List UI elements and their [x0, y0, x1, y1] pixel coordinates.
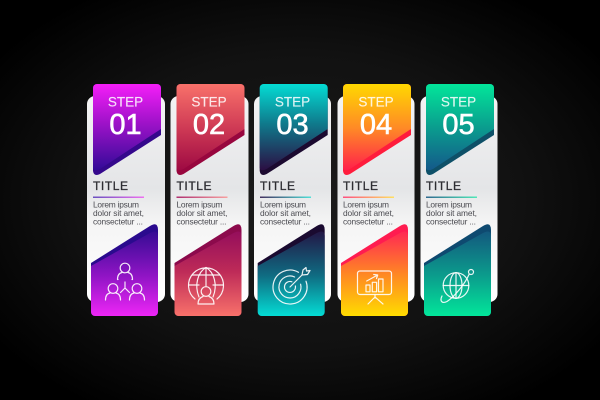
body text 4: consectetur ... — [343, 216, 393, 226]
body text 3: dolor sit amet, — [260, 208, 311, 218]
body text 4 — [343, 200, 394, 226]
body text 1: consectetur ... — [93, 216, 143, 226]
top ribbon 1 — [93, 84, 161, 175]
card body 4 — [338, 96, 414, 302]
body text 2 — [176, 200, 228, 226]
title 5: TITLE — [426, 179, 461, 193]
divider 5 — [426, 196, 477, 198]
step number 3: 03 — [276, 109, 309, 141]
step number 5: 05 — [442, 109, 475, 141]
body text 4: Lorem ipsum — [343, 200, 389, 210]
step label 1: STEP — [108, 94, 143, 110]
body text 2: Lorem ipsum — [176, 200, 223, 210]
panel: step 3 — [254, 84, 331, 316]
body text 1: Lorem ipsum — [93, 200, 139, 210]
body text 1 — [93, 200, 144, 226]
step number 1: 01 — [109, 109, 142, 141]
card body 2 — [170, 96, 248, 302]
bottom ribbon 4 — [341, 224, 408, 316]
body text 3 — [260, 200, 311, 226]
panel: step 2 — [170, 84, 248, 316]
bottom ribbon 5 — [424, 224, 491, 316]
body text 5: consectetur ... — [426, 216, 476, 226]
step number 4: 04 — [360, 109, 392, 141]
card body 3 — [254, 96, 331, 302]
panel: step 4 — [338, 84, 414, 316]
bottom ribbon 2 — [174, 224, 242, 316]
title 4: TITLE — [343, 179, 378, 193]
top ribbon 4 — [343, 84, 411, 175]
panel: step 5 — [420, 84, 498, 316]
body text 3: consectetur ... — [260, 216, 310, 226]
top ribbon 5 — [426, 84, 494, 175]
body text 3: Lorem ipsum — [260, 200, 306, 210]
body text 5: dolor sit amet, — [426, 208, 477, 218]
divider 3 — [260, 196, 311, 198]
icon: globe with person — [188, 268, 224, 304]
icon: presentation board — [358, 271, 392, 304]
body text 2: dolor sit amet, — [176, 208, 228, 218]
step label 4: STEP — [358, 94, 394, 110]
top ribbon 3 — [260, 84, 328, 175]
title 3: TITLE — [260, 179, 295, 193]
body text 1: dolor sit amet, — [93, 208, 144, 218]
panel: step 1 — [87, 84, 165, 316]
icon: people network — [106, 263, 144, 300]
title 2: TITLE — [176, 179, 212, 193]
body text 5 — [426, 200, 477, 226]
step label 3: STEP — [275, 94, 310, 110]
icon: target with arrow — [273, 268, 310, 304]
icon: globe with orbit — [441, 270, 474, 302]
bottom ribbon 1 — [91, 224, 158, 316]
divider 1 — [93, 196, 144, 198]
card body 1 — [87, 96, 165, 302]
step label 5: STEP — [441, 94, 476, 110]
body text 4: dolor sit amet, — [343, 208, 394, 218]
divider 2 — [176, 196, 228, 198]
card body 5 — [420, 96, 498, 302]
top ribbon 2 — [176, 84, 244, 175]
divider 4 — [343, 196, 394, 198]
bottom ribbon 3 — [258, 224, 325, 316]
step number 2: 02 — [193, 109, 225, 141]
body text 5: Lorem ipsum — [426, 200, 472, 210]
title 1: TITLE — [93, 179, 128, 193]
body text 2: consectetur ... — [176, 216, 226, 226]
step label 2: STEP — [191, 94, 227, 110]
